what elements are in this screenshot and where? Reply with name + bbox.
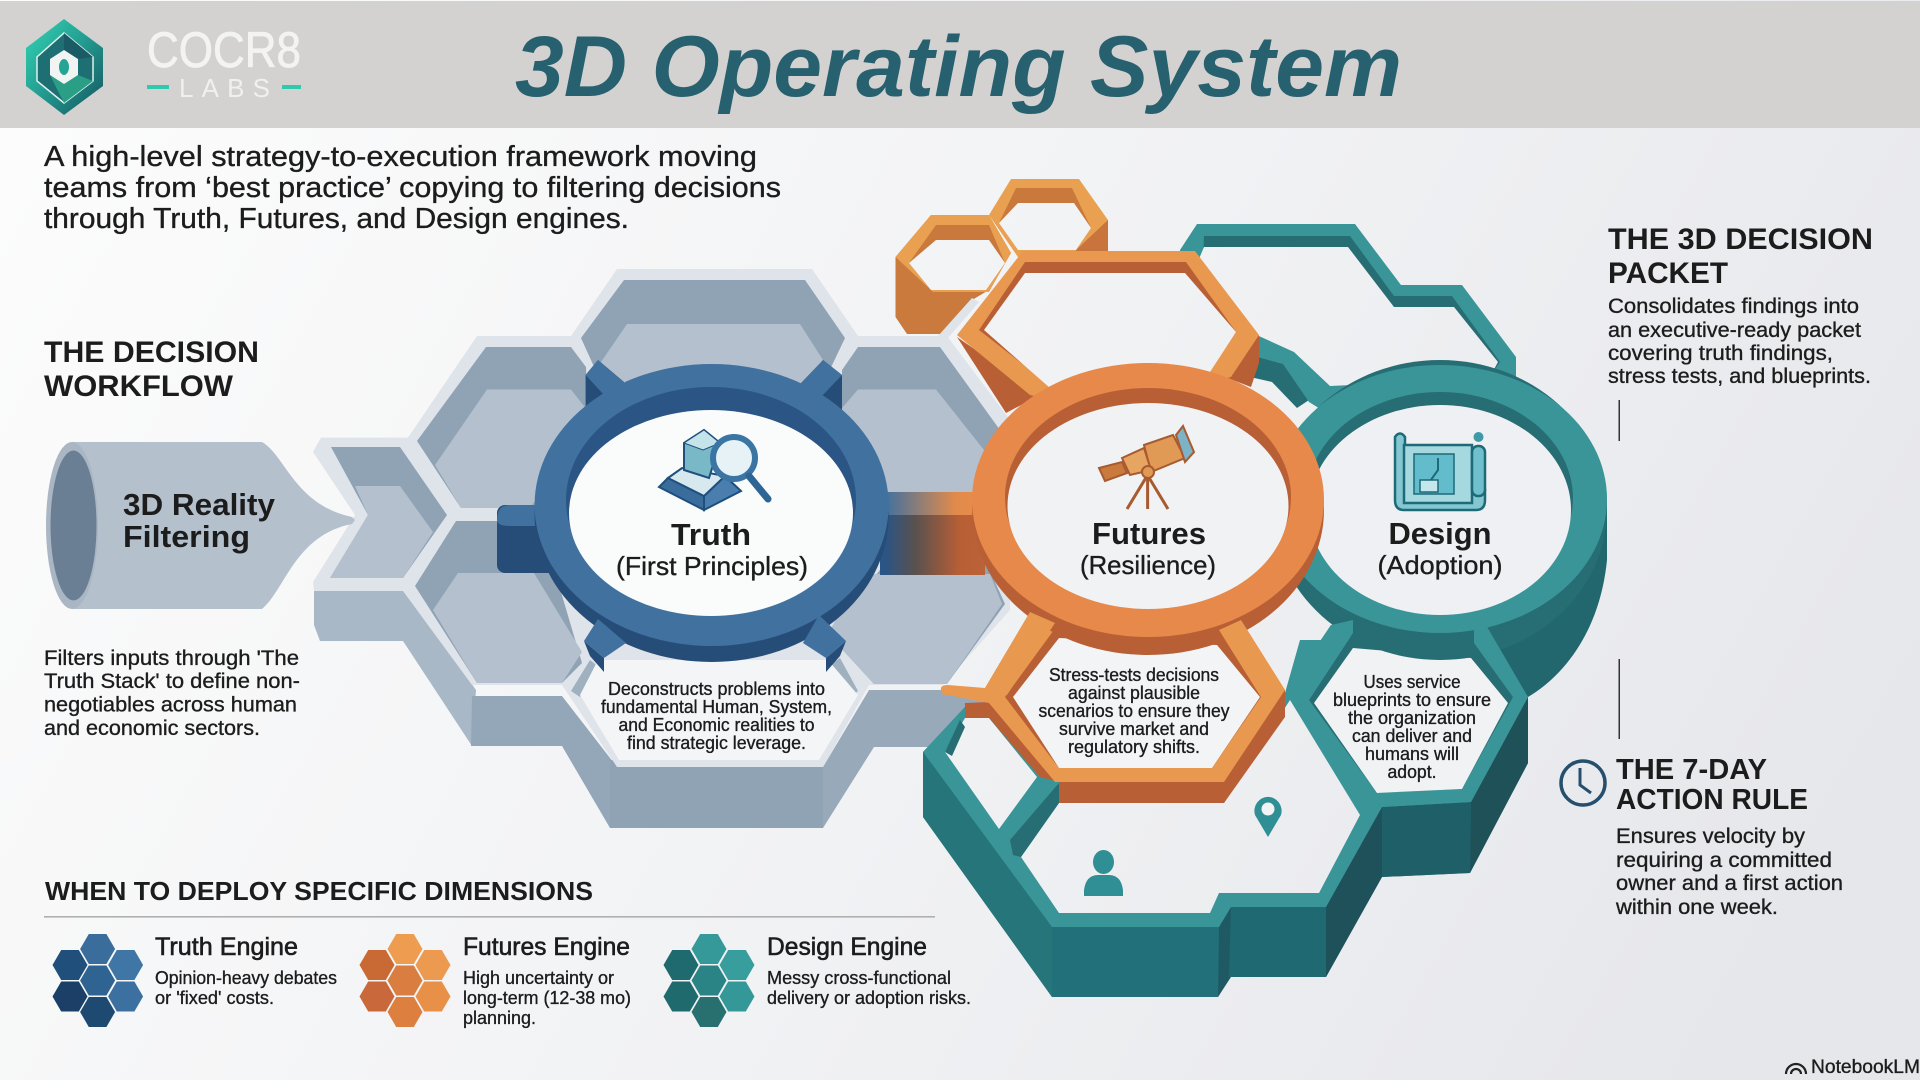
icon: telescope (1099, 426, 1194, 509)
futures description: regulatory shifts. (1068, 737, 1200, 757)
design labels: Design (1388, 516, 1492, 551)
panel: the 3D decision packet: covering truth findings, (1608, 341, 1833, 365)
panel: the 7-day action rule: THE 7-DAY (1616, 754, 1767, 786)
heading: when to deploy: WHEN TO DEPLOY SPECIFIC DIMENSIONS (45, 876, 593, 906)
arrow cell (330, 447, 447, 578)
design labels (1378, 516, 1502, 580)
workflow description: negotiables across human (44, 692, 297, 716)
intro text: teams from ‘best practice’ copying to filtering decisions (44, 172, 781, 204)
futures engine text: High uncertainty or (463, 967, 614, 988)
futures engine text: planning. (463, 1007, 536, 1028)
lower right cell (828, 560, 1005, 684)
futures description (1038, 665, 1230, 757)
panel: the 3D decision packet: stress tests, and blueprints. (1608, 364, 1871, 388)
intro text: through Truth, Futures, and Design engines. (44, 203, 629, 235)
design crescent shadow (1486, 450, 1607, 697)
design engine text: delivery or adoption risks. (767, 987, 971, 1008)
design description: blueprints to ensure (1333, 690, 1491, 710)
title: 3D Operating System (515, 19, 1402, 115)
futures engine text: long-term (12-38 mo) (463, 987, 631, 1008)
design engine text (767, 933, 971, 1008)
orange small hexagons (896, 179, 1108, 334)
design engine text: Design Engine (767, 933, 927, 961)
logo: COCR8 (147, 22, 301, 78)
panel: the 7-day action rule (1615, 754, 1843, 919)
orange lower hexagon (941, 612, 1285, 803)
intro text (44, 141, 781, 235)
design description: the organization (1348, 708, 1476, 728)
cylinder: 3D reality filtering: 3D Reality (123, 487, 276, 522)
extruded walls (314, 590, 476, 746)
heading: the decision workflow: THE DECISION (44, 336, 259, 369)
panel: the 7-day action rule: owner and a first action (1616, 871, 1843, 895)
panel: the 3D decision packet: PACKET (1608, 257, 1728, 290)
frame (313, 269, 1010, 767)
icon: blueprint (1395, 432, 1485, 510)
icon: person (1084, 850, 1123, 896)
heading: the decision workflow (44, 336, 259, 403)
design engine text: Messy cross-functional (767, 967, 951, 988)
upper left cell (417, 347, 587, 508)
truth description: Deconstructs problems into (608, 679, 825, 699)
upper right cell (842, 347, 1000, 492)
panel: the 7-day action rule: Ensures velocity by (1616, 824, 1805, 848)
panel: the 3D decision packet: Consolidates findings into (1608, 294, 1859, 318)
design description: Uses service (1364, 672, 1460, 692)
cylinder: 3D reality filtering (46, 442, 355, 609)
futures engine text (463, 933, 631, 1028)
intro text: A high-level strategy-to-execution framework moving (44, 141, 757, 173)
icon: design engine hexagons (664, 934, 754, 1027)
logo: LABS (179, 73, 270, 103)
truth engine text: Opinion-heavy debates (155, 967, 337, 988)
truth ring (497, 360, 889, 672)
design text hexagon (1285, 625, 1528, 807)
bottom text cell (571, 660, 600, 697)
futures description: survive market and (1059, 719, 1209, 739)
notebooklm badge: NotebookLM (1811, 1056, 1920, 1078)
truth engine text: Truth Engine (155, 933, 298, 961)
futures labels (1080, 516, 1216, 580)
icon: truth engine hexagons (52, 934, 143, 1027)
truth description (601, 679, 832, 753)
panel: the 3D decision packet (1608, 223, 1873, 388)
heading: the decision workflow: WORKFLOW (44, 370, 234, 403)
design description (1333, 672, 1491, 782)
truth description: and Economic realities to (618, 715, 814, 735)
design description: can deliver and (1352, 726, 1472, 746)
workflow description: Truth Stack' to define non- (44, 669, 300, 693)
futures description: scenarios to ensure they (1038, 701, 1230, 721)
cylinder: 3D reality filtering: Filtering (123, 519, 250, 554)
panel: the 7-day action rule: ACTION RULE (1616, 784, 1808, 816)
truth description: fundamental Human, System, (601, 697, 832, 717)
design description: humans will (1365, 744, 1459, 764)
truth labels: Truth (671, 517, 751, 552)
futures labels: Futures (1092, 516, 1206, 551)
truth engine text: or 'fixed' costs. (155, 987, 274, 1008)
truth labels (616, 517, 808, 581)
workflow description: and economic sectors. (44, 716, 260, 740)
teal upper hexagon outline (1180, 224, 1516, 415)
futures description: against plausible (1068, 683, 1200, 703)
panel: the 3D decision packet: THE 3D DECISION (1608, 223, 1873, 256)
logo (26, 19, 301, 115)
truth engine grey hexagon structure (313, 269, 1010, 828)
icon: futures engine hexagons (360, 934, 450, 1027)
lower left cell (415, 521, 582, 683)
icon: clock (1561, 761, 1605, 805)
design ring (1273, 360, 1607, 700)
panel: the 7-day action rule: within one week. (1615, 895, 1778, 919)
design description: adopt. (1388, 762, 1436, 782)
futures engine text: Futures Engine (463, 933, 630, 961)
header band (0, 1, 1920, 128)
truth labels: (First Principles) (616, 551, 808, 581)
truth description: find strategic leverage. (627, 733, 806, 753)
panel: the 7-day action rule: requiring a committed (1616, 848, 1832, 872)
connector truth to futures (880, 492, 985, 575)
icon: location pin (1254, 797, 1282, 837)
design labels: (Adoption) (1378, 550, 1502, 580)
futures ring (972, 363, 1324, 697)
top cell (581, 280, 845, 380)
futures labels: (Resilience) (1080, 550, 1216, 580)
icon: truth block and magnifier (659, 430, 768, 510)
teal lower hexagon frame (923, 640, 1528, 997)
truth engine text (155, 933, 337, 1008)
workflow description: Filters inputs through 'The (44, 646, 299, 670)
orange upper hexagon (957, 251, 1259, 413)
workflow description (44, 646, 300, 740)
futures description: Stress-tests decisions (1049, 665, 1219, 685)
panel: the 3D decision packet: an executive-ready packet (1608, 318, 1861, 342)
